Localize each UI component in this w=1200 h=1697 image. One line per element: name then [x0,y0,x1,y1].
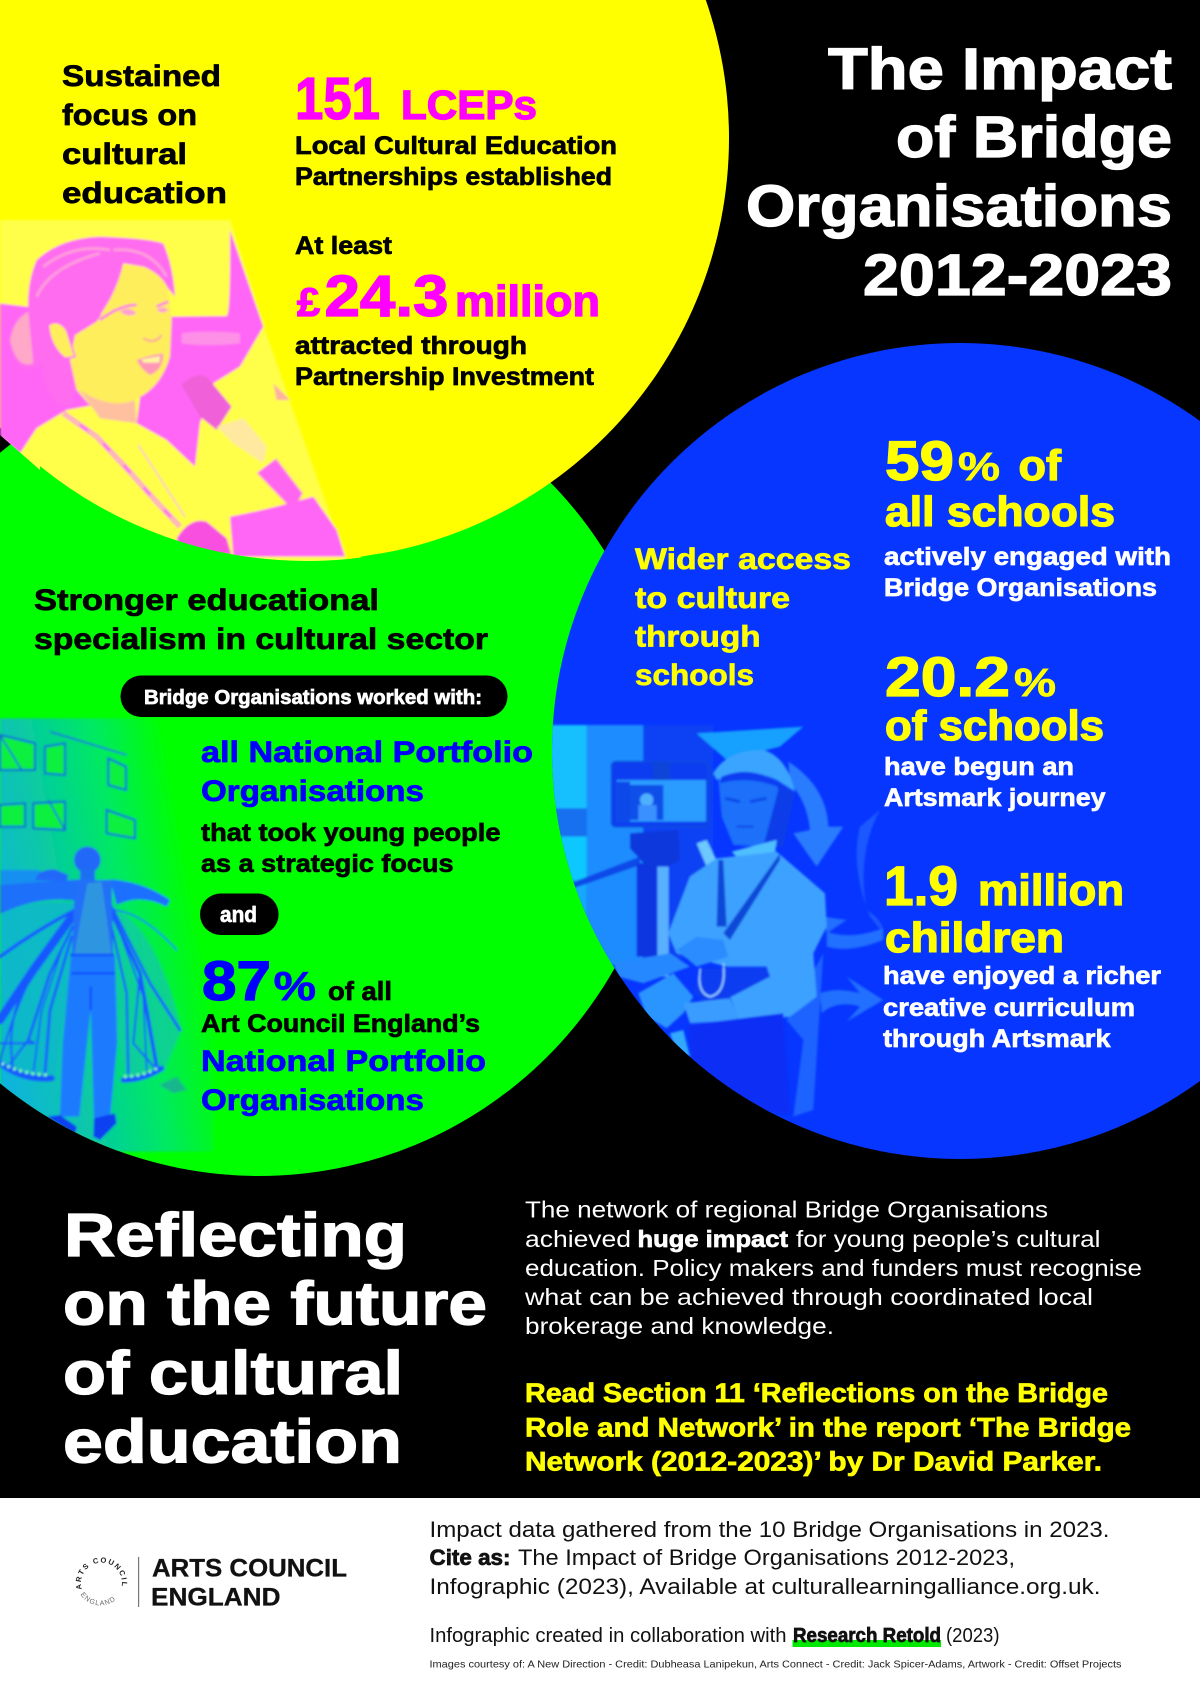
collaboration credit [430,1625,1000,1647]
statistic: 87% of all Arts Council England's National Portfolio Organisations: National Portfolio [201,1045,486,1078]
text: attracted through Partnership Investment: Partnership Investment [295,363,595,391]
statistic: 59% of all schools [885,429,1115,535]
text: Local Cultural Education Partnerships established: Local Cultural Education [295,132,617,160]
heading: reflecting on the future of cultural education: of cultural [63,1339,403,1407]
statistic: £24.3 million [297,264,600,329]
logo: Arts Council England: ARTS COUNCIL [76,1558,128,1590]
text: that took young people as a strategic focus: that took young people [201,819,501,847]
statistic: £24.3 million: £ [297,281,320,325]
heading: stronger educational specialism: Stronger educational [34,584,379,617]
text: attracted through Partnership Investment [295,332,595,391]
text: have enjoyed a richer creative curriculum through Artsmark: through Artsmark [883,1025,1111,1053]
collaboration credit: (2023) [946,1625,1000,1647]
statistic: 87% of all Arts Council England's National Portfolio Organisations [201,949,486,1117]
label pill: Bridge Organisations worked with: Bridge Organisations worked with: [144,687,482,709]
logo: Arts Council England: ENGLAND [80,1592,114,1606]
text: all National Portfolio Organisations: all National Portfolio [201,736,533,769]
title: Organisations [746,174,1172,239]
text: have enjoyed a richer creative curriculum through Artsmark: have enjoyed a richer [883,962,1161,990]
title [746,37,1172,308]
text: have begun an Artsmark journey: Artsmark journey [884,784,1106,812]
logo: Arts Council England: ARTS COUNCIL [152,1554,347,1582]
text: have begun an Artsmark journey: have begun an [884,753,1074,781]
statistic: 1.9 million children [884,854,1124,961]
statistic: 1.9 million children: children [885,914,1064,961]
text block: network achieved huge impact: achieved [525,1226,631,1252]
heading: wider access to culture through schools [635,543,851,692]
title: The Impact [828,37,1172,102]
footer panel [0,1498,1200,1697]
citation text [430,1517,1110,1599]
citation text: Impact data gathered from the 10 Bridge Organisations in 2023. [430,1517,1110,1542]
image credits: Images courtesy of: A New Direction - Credit: Dubheasa Lanipekun, Arts Connect - Credit: Jack Spicer-Adams, Artwork - Credit: Offset Projects [430,1658,1122,1670]
heading: reflecting on the future of cultural education: Reflecting [64,1201,407,1269]
label pill: and: and [220,902,257,927]
text block: network achieved huge impact: huge impact [638,1226,788,1252]
panel: yellow circle [0,0,729,563]
logo: Arts Council England: ENGLAND [151,1584,280,1612]
statistic: 151 LCEPs [295,66,537,132]
heading: stronger educational specialism: specialism in cultural sector [34,623,488,656]
collaboration credit: Research Retold [793,1625,941,1647]
statistic: 151 LCEPs: LCEPs [401,82,537,128]
statistic: 20.2% of schools: % [1014,661,1056,705]
text: attracted through Partnership Investment: attracted through [295,332,527,360]
photo: person wearing butterfly wings [0,718,213,1152]
call to action: read section 11 [525,1378,1131,1476]
statistic: 20.2% of schools [885,645,1104,749]
text: actively engaged with Bridge Organisations [884,543,1171,602]
citation text: Infographic (2023), Available at culturallearningalliance.org.uk. [430,1574,1100,1599]
photo: woman speaking into microphone [0,220,363,563]
text: have enjoyed a richer creative curriculum through Artsmark [883,962,1161,1053]
text: have begun an Artsmark journey [884,753,1106,812]
heading: stronger educational specialism [34,584,488,656]
panel: green circle [0,444,614,1176]
heading: reflecting on the future of cultural education: on the future [63,1270,487,1338]
text: all National Portfolio Organisations [201,736,533,808]
text: have enjoyed a richer creative curriculum through Artsmark: creative curriculum [883,994,1135,1022]
statistic: 87% of all Arts Council England's National Portfolio Organisations: 87 [202,949,271,1012]
heading: sustained focus on cultural education: education [62,177,227,210]
collaboration credit: Infographic created in collaboration with [430,1625,786,1647]
text: that took young people as a strategic focus: as a strategic focus [201,850,454,878]
statistic: 1.9 million children: 1.9 [884,854,958,917]
label pill: and [200,894,279,935]
heading: reflecting on the future of cultural education [63,1201,487,1476]
heading: reflecting on the future of cultural education: education [63,1408,402,1476]
text: Local Cultural Education Partnerships established [295,132,617,191]
heading: sustained focus on cultural education [62,60,227,210]
statistic: 87% of all Arts Council England's National Portfolio Organisations: of all [328,976,392,1006]
heading: wider access to culture through schools: through [635,620,761,654]
text: actively engaged with Bridge Organisations: Bridge Organisations [884,574,1157,602]
text block: network achieved huge impact: brokerage and knowledge. [525,1313,834,1339]
heading: sustained focus on cultural education: Sustained [62,60,221,93]
label pill: Bridge Organisations worked with [120,676,508,717]
statistic: 87% of all Arts Council England's National Portfolio Organisations: % [274,963,316,1009]
heading: wider access to culture through schools: schools [635,659,754,692]
text: that took young people as a strategic focus [201,819,501,878]
title: of Bridge [896,105,1172,170]
statistic: £24.3 million: 24.3 [324,264,448,329]
citation text: The Impact of Bridge Organisations 2012-2023, [518,1545,1015,1570]
citation text: Cite as: [430,1545,510,1570]
statistic: 1.9 million children: million [978,866,1124,915]
call to action: read section 11: Role and Network’ in the report ‘The Bridge [525,1412,1131,1442]
call to action: read section 11: Read Section 11 ‘Reflections on the Bridge [525,1378,1108,1408]
title: 2012-2023 [863,243,1172,308]
panel: blue circle [550,343,1200,1159]
text block: network achieved huge impact: for young people’s cultural [796,1226,1100,1252]
text: all National Portfolio Organisations: Organisations [201,775,424,808]
statistic: £24.3 million: million [455,277,600,326]
statistic: 59% of all schools: % [958,445,1000,489]
statistic: 20.2% of schools: of schools [885,702,1104,749]
statistic: 87% of all Arts Council England's National Portfolio Organisations: Organisations [201,1084,424,1117]
text block: network achieved huge impact: The network of regional Bridge Organisations [525,1196,1048,1222]
photo: child filming with phone on tripod [550,725,883,1117]
text: actively engaged with Bridge Organisations: actively engaged with [884,543,1171,571]
text block: network achieved huge impact: education. Policy makers and funders must recognise [525,1255,1142,1281]
call to action: read section 11: Network (2012-2023)’ by Dr David Parker. [525,1446,1102,1476]
heading: wider access to culture through schools: Wider access [635,543,851,576]
text block: network achieved huge impact: what can be achieved through coordinated local [524,1284,1093,1310]
heading: sustained focus on cultural education: focus on [62,99,197,132]
text: at least: At least [295,232,393,260]
statistic: 87% of all Arts Council England's National Portfolio Organisations: Art Council England’s [201,1010,480,1038]
statistic: 59% of all schools: 59 [885,429,954,492]
text block: network achieved huge impact [524,1196,1142,1339]
text: Local Cultural Education Partnerships established: Partnerships established [295,163,612,191]
statistic: 59% of all schools: of [1018,442,1062,490]
statistic: 59% of all schools: all schools [885,488,1115,535]
statistic: 151 LCEPs: 151 [295,66,380,132]
heading: wider access to culture through schools: to culture [635,582,790,615]
logo: Arts Council England [76,1554,347,1612]
statistic: 20.2% of schools: 20.2 [885,645,1010,708]
heading: sustained focus on cultural education: cultural [62,138,187,171]
